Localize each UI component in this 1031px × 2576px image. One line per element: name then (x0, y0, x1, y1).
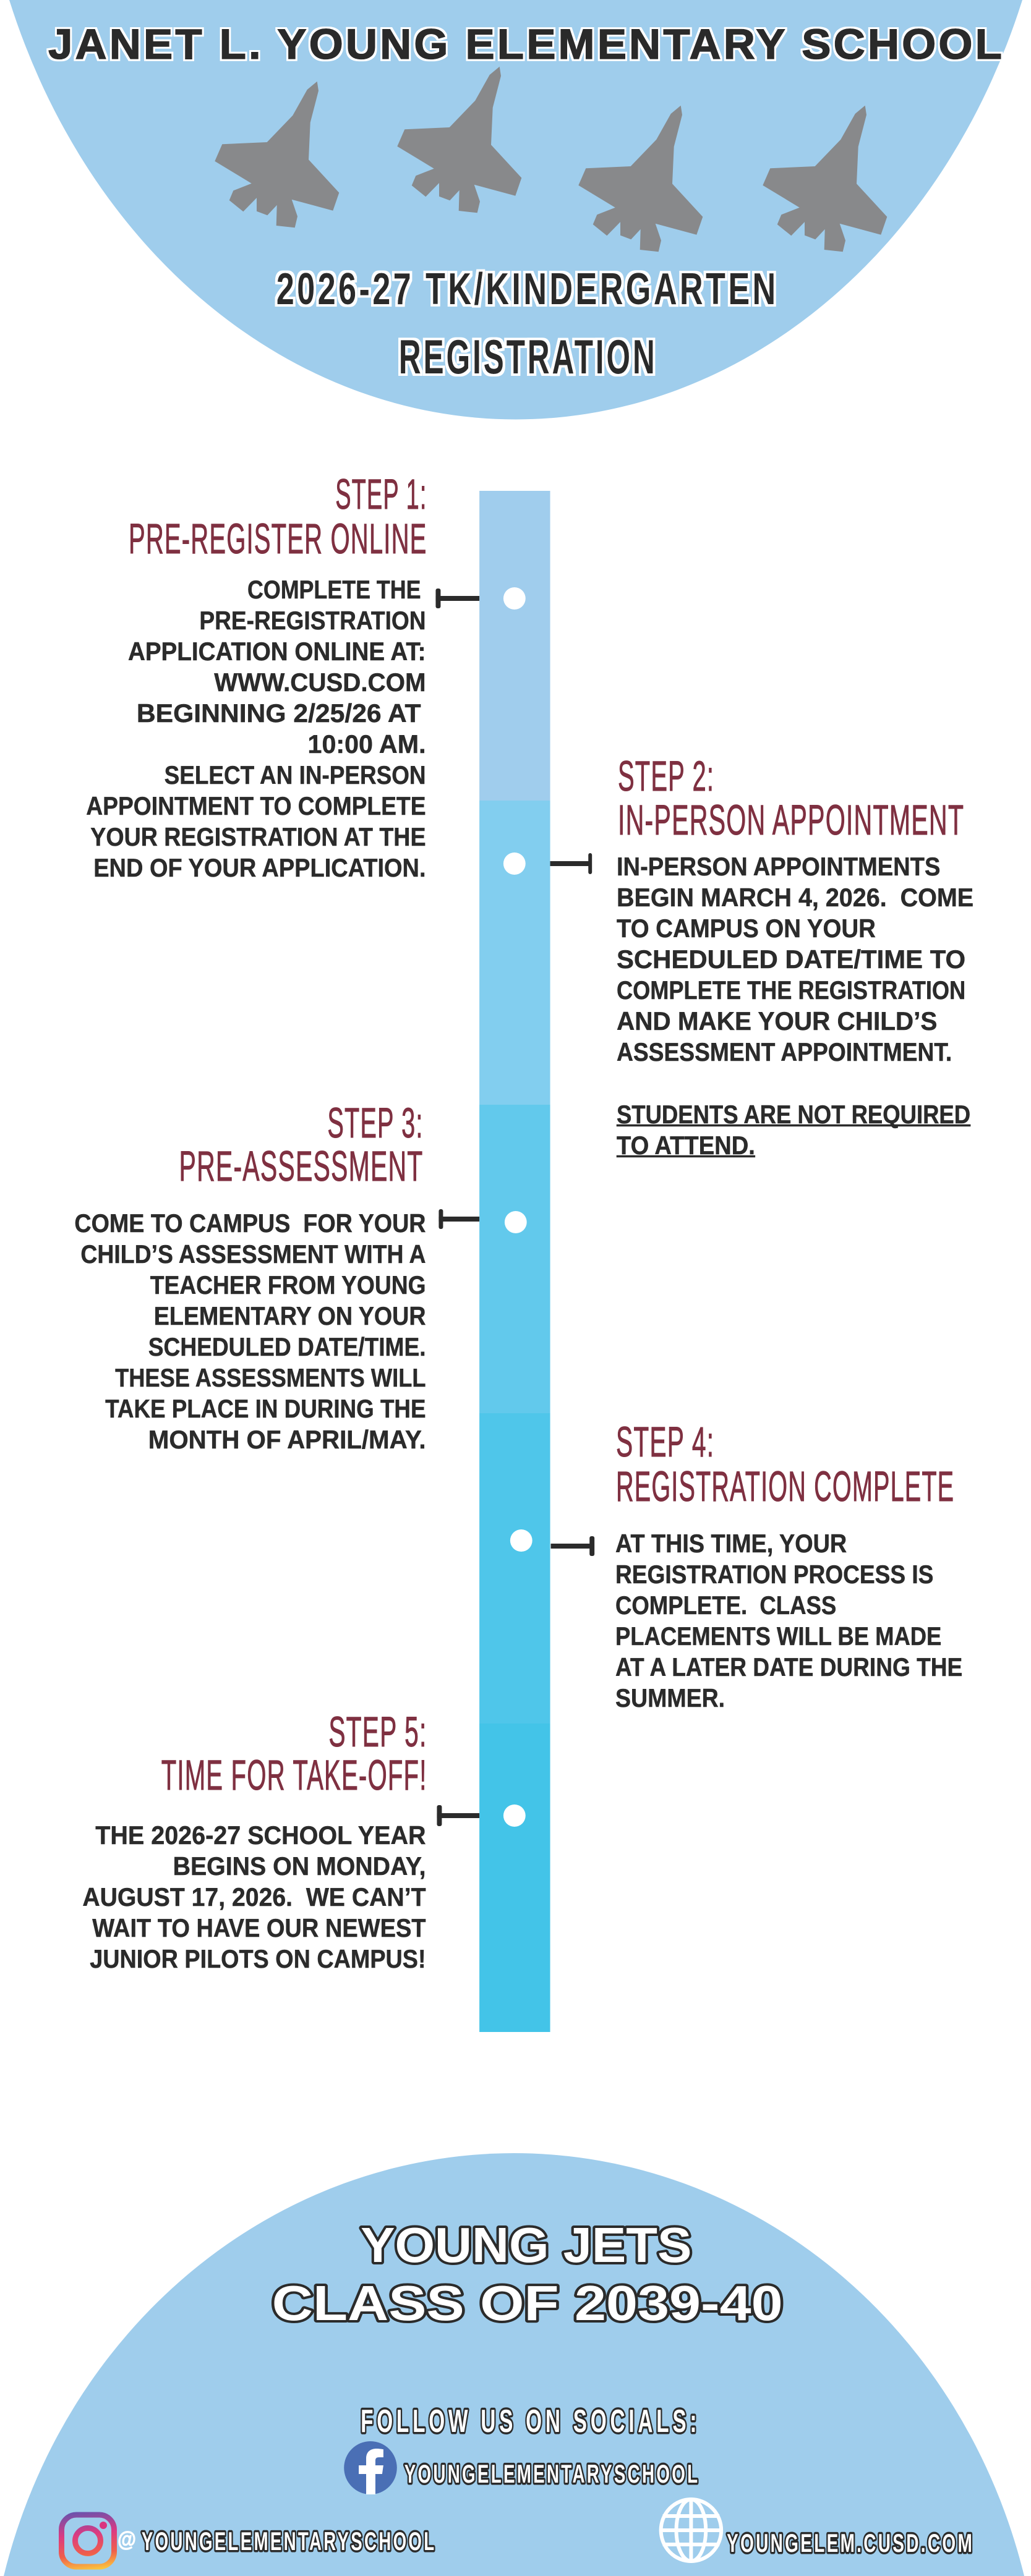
step 5 heading: STEP 5: (328, 1708, 427, 1756)
icon: facebook (344, 2441, 397, 2494)
step 2 text: AND MAKE YOUR CHILD’S (617, 1006, 937, 1035)
step 3 text: COME TO CAMPUS FOR YOUR (74, 1209, 426, 1238)
step 1 heading (129, 470, 427, 563)
icon: globe (661, 2499, 721, 2561)
icon: instagram (62, 2515, 114, 2567)
step 3 heading: STEP 3: (327, 1099, 424, 1147)
step 4 text: SUMMER. (615, 1683, 725, 1712)
step 3 text: TEACHER FROM YOUNG (150, 1270, 426, 1299)
step 5 heading: TIME FOR TAKE-OFF! (161, 1751, 427, 1799)
step 1 text: COMPLETE THE (247, 575, 421, 604)
step 2 text: SCHEDULED DATE/TIME TO (617, 945, 965, 974)
subtitle: REGISTRATION (399, 331, 657, 384)
step 2 (503, 752, 973, 1160)
step 2 text: ASSESSMENT APPOINTMENT. (617, 1037, 952, 1066)
instagram handle (118, 2527, 436, 2556)
step 2 heading: STEP 2: (618, 752, 714, 800)
step 3 (74, 1099, 527, 1454)
icons: four jets (215, 67, 887, 252)
step 2 connector and dot (503, 852, 592, 875)
step 1 text: 10:00 AM. (307, 729, 426, 759)
step 4 text (615, 1529, 962, 1712)
step 5 text: JUNIOR PILOTS ON CAMPUS! (90, 1944, 426, 1973)
step 4 text: COMPLETE. CLASS (615, 1591, 836, 1620)
step 2 note: underlined (617, 1100, 970, 1160)
step 3 heading: PRE-ASSESSMENT (179, 1142, 424, 1190)
step 4 heading: STEP 4: (616, 1418, 714, 1466)
step 1 text: PRE-REGISTRATION (199, 606, 426, 635)
step 5 text: BEGINS ON MONDAY, (173, 1851, 426, 1881)
footer heading: CLASS OF 2039-40 (272, 2276, 783, 2331)
step 5 text: WAIT TO HAVE OUR NEWEST (92, 1913, 426, 1942)
footer heading (272, 2217, 783, 2331)
instagram handle: @ (118, 2528, 136, 2551)
timeline bar (479, 491, 550, 2032)
step 5 connector and dot (437, 1804, 526, 1827)
instagram handle: YOUNGELEMENTARYSCHOOL (142, 2527, 436, 2556)
step 4 text: AT A LATER DATE DURING THE (615, 1652, 962, 1681)
facebook handle: YOUNGELEMENTARYSCHOOL (404, 2459, 699, 2488)
step 5 heading (161, 1708, 427, 1799)
step 4 text: REGISTRATION PROCESS IS (615, 1560, 933, 1589)
step 1 text: YOUR REGISTRATION AT THE (90, 822, 426, 851)
step 4 (510, 1418, 962, 1712)
step 2 text (617, 852, 973, 1066)
step 2 note: underlined: STUDENTS ARE NOT REQUIRED (617, 1100, 970, 1129)
step 3 text: ELEMENTARY ON YOUR (154, 1301, 426, 1330)
step 2 text: TO CAMPUS ON YOUR (617, 914, 876, 943)
step 1 connector and dot (435, 587, 526, 610)
step 2 heading (618, 752, 964, 844)
step 1 heading: STEP 1: (335, 470, 427, 518)
step 1 text: END OF YOUR APPLICATION. (93, 853, 426, 882)
step 1 text: SELECT AN IN-PERSON (165, 760, 426, 789)
step 2 note: underlined: TO ATTEND. (617, 1131, 755, 1160)
step 3 text: MONTH OF APRIL/MAY. (148, 1425, 426, 1454)
step 3 connector and dot (438, 1209, 527, 1233)
step 1 heading: PRE-REGISTER ONLINE (129, 515, 427, 563)
follow us label: FOLLOW US ON SOCIALS: (361, 2403, 700, 2439)
step 5 text: THE 2026-27 SCHOOL YEAR (95, 1821, 426, 1850)
step 3 text (74, 1209, 426, 1454)
step 3 text: CHILD’S ASSESSMENT WITH A (80, 1239, 426, 1269)
footer panel (4, 2153, 1024, 2576)
header panel (9, 0, 1022, 419)
step 3 text: THESE ASSESSMENTS WILL (115, 1363, 426, 1392)
step 2 text: IN-PERSON APPOINTMENTS (617, 852, 940, 881)
step 4 text: PLACEMENTS WILL BE MADE (615, 1622, 941, 1651)
step 2 text: BEGIN MARCH 4, 2026. COME (617, 883, 973, 912)
step 3 text: TAKE PLACE IN DURING THE (105, 1394, 426, 1423)
step 4 heading (616, 1418, 954, 1510)
header background shape (9, 0, 1022, 419)
step 1 text: BEGINNING 2/25/26 AT (137, 699, 421, 728)
step 3 text: SCHEDULED DATE/TIME. (148, 1332, 426, 1361)
step 1 text: WWW.CUSD.COM (214, 668, 426, 697)
footer background shape (4, 2153, 1024, 2576)
footer heading: YOUNG JETS (361, 2217, 691, 2272)
step 1 text (86, 575, 426, 882)
title: school name: JANET L. YOUNG ELEMENTARY SCHOOL (48, 20, 1004, 68)
step 4 connector and dot (510, 1529, 594, 1556)
step 2 text: COMPLETE THE REGISTRATION (617, 976, 965, 1005)
subtitle: 2026-27 TK/KINDERGARTEN (276, 265, 779, 314)
step 5 text: AUGUST 17, 2026. WE CAN’T (82, 1882, 426, 1911)
step 5 text (82, 1821, 426, 1973)
subtitle (276, 265, 779, 384)
step 1 text: APPOINTMENT TO COMPLETE (86, 791, 426, 820)
step 3 heading (179, 1099, 424, 1190)
step 1 text: APPLICATION ONLINE AT: (128, 637, 426, 666)
step 4 text: AT THIS TIME, YOUR (615, 1529, 847, 1558)
step 5 (82, 1708, 526, 1973)
step 1 (86, 470, 526, 882)
